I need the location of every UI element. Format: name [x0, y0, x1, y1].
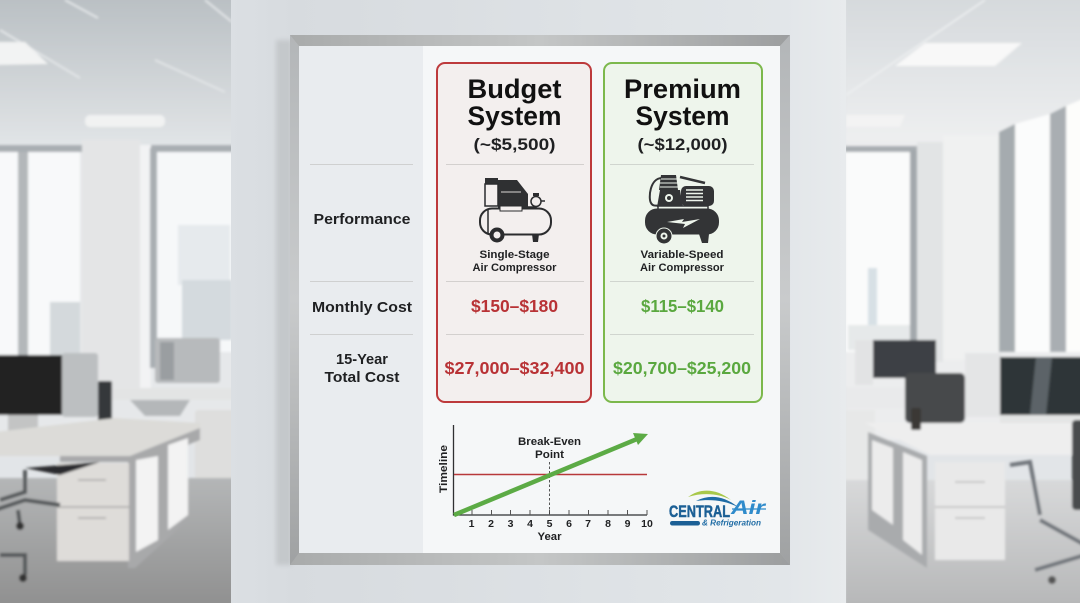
card background: [604, 63, 762, 402]
value: budget monthly cost: $150–$180: [471, 296, 558, 316]
chart: break-even timeline: [438, 425, 653, 543]
caption: single-stage air compressor: Air Compressor: [472, 262, 557, 274]
heading: premium system: System: [636, 101, 730, 131]
x-axis numbers: 4: [527, 518, 533, 530]
x-axis numbers: 3: [508, 518, 514, 530]
logo: central air and refrigeration: CENTRAL: [669, 502, 730, 521]
label: monthly cost: Monthly Cost: [312, 299, 412, 316]
background: wall: [231, 0, 846, 603]
heading: budget system: [468, 74, 562, 154]
heading: budget system: System: [468, 101, 562, 131]
break-even marker: [548, 462, 550, 515]
heading: budget system: (~$5,500): [474, 135, 556, 154]
label: 15-year total cost: Total Cost: [324, 369, 400, 386]
x-axis label: Year: [538, 531, 562, 543]
value: premium 15-year cost: $20,700–$25,200: [613, 358, 751, 378]
x-axis numbers: [469, 518, 653, 530]
x-axis numbers: 9: [625, 518, 631, 530]
arrow: premium savings: [454, 433, 648, 515]
label: break-even point: Break-Even: [518, 436, 581, 448]
x-axis numbers: 2: [488, 518, 494, 530]
poster frame: [290, 35, 790, 565]
label: break-even point: [518, 436, 581, 461]
x-axis numbers: 6: [566, 518, 572, 530]
icon: single-stage compressor: [480, 178, 551, 242]
panel: premium system: [604, 63, 762, 402]
icon: variable-speed compressor: [645, 175, 719, 244]
value: budget 15-year cost: $27,000–$32,400: [444, 358, 585, 378]
caption: variable-speed air compressor: Air Compressor: [640, 262, 725, 274]
card background: [437, 63, 591, 402]
heading: budget system: Budget: [468, 74, 562, 104]
background: blurred office left: [0, 0, 235, 603]
logo: central air and refrigeration: & Refrigeration: [702, 518, 761, 528]
label: 15-year total cost: [324, 351, 400, 386]
row dividers: [310, 164, 413, 334]
axes: [454, 425, 647, 515]
logo: central air and refrigeration: Air: [730, 498, 767, 519]
x-axis numbers: 5: [547, 518, 553, 530]
caption: variable-speed air compressor: Variable-Speed: [640, 249, 724, 261]
x-axis numbers: 7: [585, 518, 591, 530]
value: premium monthly cost: $115–$140: [641, 296, 724, 316]
row labels: [312, 211, 412, 386]
heading: premium system: Premium: [624, 74, 741, 104]
x-axis numbers: 8: [605, 518, 611, 530]
caption: single-stage air compressor: [472, 249, 557, 274]
label: break-even point: Point: [535, 449, 564, 461]
x-axis numbers: 1: [469, 518, 475, 530]
heading: premium system: [624, 74, 741, 154]
heading: premium system: (~$12,000): [638, 135, 728, 154]
caption: single-stage air compressor: Single-Stage: [480, 249, 550, 261]
panel: budget system: [437, 63, 591, 402]
budget line: [454, 474, 647, 476]
caption: variable-speed air compressor: [640, 249, 725, 274]
label: performance: Performance: [314, 211, 410, 228]
poster panel: [299, 46, 780, 553]
background: blurred office right: [845, 0, 1080, 603]
x-axis numbers: 10: [641, 518, 653, 530]
label: 15-year total cost: 15-Year: [336, 351, 388, 368]
logo: central air and refrigeration: [669, 491, 767, 528]
y-axis label: Timeline: [438, 445, 450, 493]
